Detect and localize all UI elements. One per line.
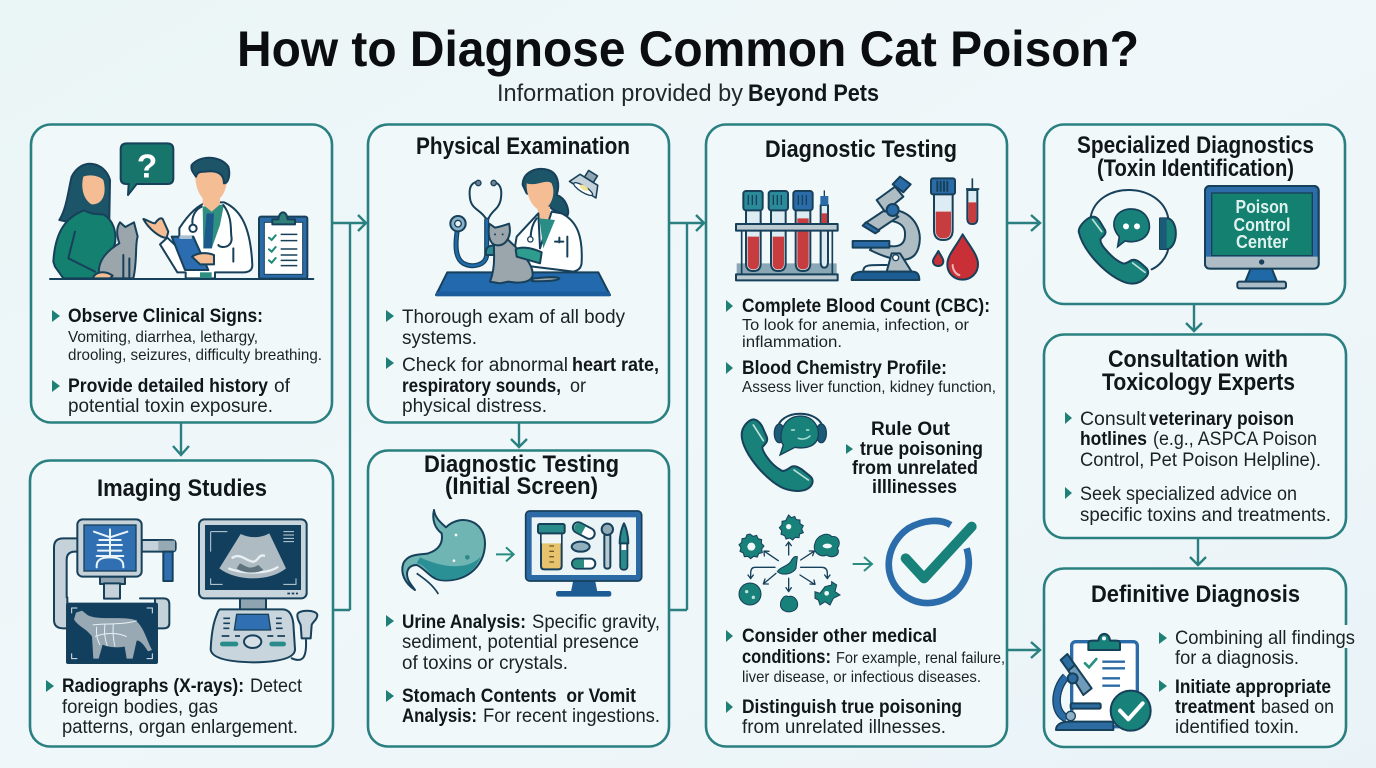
heading: Toxicology Experts — [1102, 369, 1295, 396]
heading: Diagnostic Testing — [765, 136, 957, 163]
title: How to Diagnose Common Cat Poison? — [237, 21, 1139, 77]
bullet — [52, 380, 60, 392]
text: distinguish true poisoning: Distinguish true poisoning — [742, 697, 962, 718]
text: combining findings: Combining all findings — [1175, 628, 1355, 649]
text: stomach contents — [402, 686, 660, 727]
text: distinguish true poisoning — [742, 697, 962, 738]
text: blood chemistry profile: Blood Chemistry Profile: — [742, 358, 947, 379]
text: initiate treatment: treatment — [1175, 697, 1256, 718]
text: check heart rate: heart rate, — [572, 355, 659, 376]
heading: Consultation with — [1108, 346, 1288, 373]
bullet — [386, 357, 394, 369]
text: consult hotlines: (e.g., ASPCA Poison — [1153, 429, 1317, 450]
text: consider other conditions: Consider other medical — [742, 626, 937, 647]
text: check heart rate: respiratory sounds, — [402, 376, 561, 397]
text: radiographs — [62, 676, 303, 738]
icon: differential causes diagram — [739, 515, 840, 612]
illustration: ultrasound machine — [199, 519, 317, 662]
heading: Physical Examination — [416, 133, 630, 160]
text: complete blood count: Complete Blood Count (CBC): — [742, 296, 990, 317]
text: observe clinical signs — [68, 306, 322, 364]
bullet — [52, 310, 60, 322]
text: provide detailed history: Provide detailed history — [68, 376, 268, 397]
subtitle: Information provided by — [497, 80, 743, 107]
text: complete blood count: inflammation. — [742, 334, 842, 351]
heading — [1102, 346, 1295, 396]
heading — [1077, 132, 1314, 182]
subtitle: Beyond Pets — [748, 80, 879, 107]
illustration: blood vials and drops — [931, 178, 979, 280]
icon: clipboard, microscope and check — [1056, 634, 1151, 731]
icon: poison control monitor — [1205, 186, 1319, 288]
text: seek specialized advice: Seek specialized advice on — [1080, 484, 1297, 505]
bullet — [386, 310, 394, 322]
illustration: microscope — [852, 177, 920, 280]
text: consider other conditions: liver disease, or infectious diseases. — [742, 669, 981, 686]
icon: phone with headset bubble — [742, 414, 826, 491]
text: seek specialized advice: specific toxins and treatments. — [1080, 505, 1331, 526]
panel: diagnostic testing — [706, 124, 1007, 746]
bullet — [846, 444, 853, 454]
text: combining findings: for a diagnosis. — [1175, 648, 1299, 669]
heading: Diagnostic Testing — [424, 451, 619, 478]
screen label: Center — [1236, 232, 1288, 252]
text: complete blood count — [742, 296, 990, 351]
text: thorough exam: Thorough exam of all body — [402, 307, 625, 328]
illustration: x-ray machine — [54, 519, 176, 663]
text: consult hotlines: Control, Pet Poison Helpline). — [1080, 450, 1321, 471]
text: urine analysis: Urine Analysis: — [402, 612, 526, 633]
bullet — [1065, 412, 1072, 424]
heading: Imaging Studies — [97, 475, 267, 502]
text: radiographs: patterns, organ enlargement. — [62, 717, 298, 738]
text: consider other conditions — [742, 626, 1005, 686]
text: provide detailed history: potential toxin exposure. — [68, 396, 273, 417]
heading: (Initial Screen) — [445, 473, 598, 500]
connector: history to physical examination — [333, 215, 366, 610]
icon: check mark circle — [889, 521, 972, 603]
text: radiographs: foreign bodies, gas — [62, 697, 218, 718]
connector: diagnostic testing to definitive diagnosis — [1007, 642, 1040, 658]
text: initiate treatment: Initiate appropriate — [1175, 677, 1331, 698]
illustration: vet examining cat — [436, 165, 610, 296]
bullet — [1065, 487, 1072, 499]
panel: imaging studies — [30, 460, 333, 746]
connector: diagnostic testing to specialized diagnostics — [1007, 215, 1040, 231]
text: check heart rate: Check for abnormal — [402, 355, 568, 376]
text: rule out: true poisoning — [860, 439, 983, 460]
text: seek specialized advice — [1080, 484, 1331, 526]
text: initiate treatment: based on — [1261, 697, 1334, 718]
text: stomach contents: For recent ingestions. — [483, 706, 660, 727]
text: thorough exam: systems. — [402, 328, 477, 349]
heading — [424, 451, 619, 500]
text: radiographs: Detect — [250, 676, 303, 697]
panel: definitive diagnosis — [1044, 568, 1355, 747]
illustration: blood tube rack — [736, 190, 838, 280]
text: check heart rate: or — [570, 376, 587, 397]
illustration: owner, cat and veterinarian — [50, 143, 313, 279]
panel: specialized diagnostics — [1044, 124, 1345, 304]
subtitle — [497, 80, 879, 107]
text: rule out: from unrelated — [852, 458, 978, 479]
text: observe clinical signs: Vomiting, diarrhea, lethargy, — [68, 329, 258, 346]
icon: headset phone — [1079, 190, 1176, 284]
connector: specialized diagnostics to consultation — [1186, 304, 1202, 331]
connector: physical examination to initial screen — [511, 422, 527, 447]
text: combining findings — [1175, 628, 1355, 669]
text: provide detailed history — [68, 376, 291, 417]
text: consult hotlines — [1080, 409, 1321, 471]
text: stomach contents: Stomach Contents or Vomit — [402, 686, 637, 707]
text: stomach contents: Analysis: — [402, 706, 477, 727]
bullet — [1159, 680, 1167, 692]
screen label — [1234, 197, 1290, 252]
text: consider other conditions: For example, renal failure, — [836, 650, 1005, 667]
panel: physical examination — [368, 124, 669, 422]
text: distinguish true poisoning: from unrelated illnesses. — [742, 717, 946, 738]
bullet — [726, 630, 733, 642]
panel: diagnostic testing initial screen — [368, 450, 669, 746]
panel: consultation with toxicology experts — [1044, 334, 1346, 538]
illustration: test results monitor — [526, 511, 642, 597]
bullet — [726, 300, 733, 312]
heading: Definitive Diagnosis — [1091, 581, 1300, 608]
screen label: Control — [1234, 215, 1290, 235]
text: urine analysis: of toxins or crystals. — [402, 653, 568, 674]
bullet — [386, 615, 394, 627]
text: initiate treatment — [1175, 677, 1334, 738]
arrow — [496, 547, 514, 561]
arrow — [853, 557, 872, 571]
bullet — [726, 362, 733, 374]
text: rule out: illlinesses — [872, 477, 957, 498]
text: urine analysis: Specific gravity, — [532, 612, 660, 633]
panel: clinical signs and history — [31, 124, 332, 422]
text: check heart rate: physical distress. — [402, 396, 547, 417]
text: observe clinical signs: Observe Clinical Signs: — [68, 306, 263, 327]
bullet — [386, 690, 394, 702]
text: provide detailed history: of — [274, 376, 291, 397]
text: complete blood count: To look for anemia, infection, or — [742, 317, 970, 334]
illustration: owner, cat and veterinarian: ? — [137, 149, 157, 186]
screen label: Poison — [1236, 197, 1288, 217]
text: consult hotlines: veterinary poison — [1149, 409, 1294, 430]
bullet — [726, 701, 733, 713]
text: blood chemistry profile — [742, 358, 996, 396]
text: thorough exam — [402, 307, 625, 349]
heading: Specialized Diagnostics — [1077, 132, 1314, 159]
text: blood chemistry profile: Assess liver function, kidney function, — [742, 379, 996, 396]
bullet — [46, 680, 54, 692]
text: check heart rate — [402, 355, 659, 417]
text: initiate treatment: identified toxin. — [1175, 717, 1299, 738]
text: rule out — [852, 419, 983, 498]
connector: history to imaging — [173, 422, 189, 455]
text: observe clinical signs: drooling, seizures, difficulty breathing. — [68, 347, 322, 364]
text: consult hotlines: hotlines — [1080, 429, 1147, 450]
bullet — [1159, 632, 1167, 644]
text: urine analysis — [402, 612, 660, 674]
text: consult hotlines: Consult — [1080, 409, 1147, 430]
illustration: stomach — [402, 510, 485, 594]
text: consider other conditions: conditions: — [742, 647, 831, 668]
heading: (Toxin Identification) — [1097, 155, 1294, 182]
connector: consultation to definitive diagnosis — [1190, 538, 1206, 565]
connector: physical examination to diagnostic testing — [669, 215, 704, 610]
text: rule out: Rule Out — [871, 419, 951, 440]
text: urine analysis: sediment, potential presence — [402, 632, 639, 653]
text: radiographs: Radiographs (X-rays): — [62, 676, 244, 697]
